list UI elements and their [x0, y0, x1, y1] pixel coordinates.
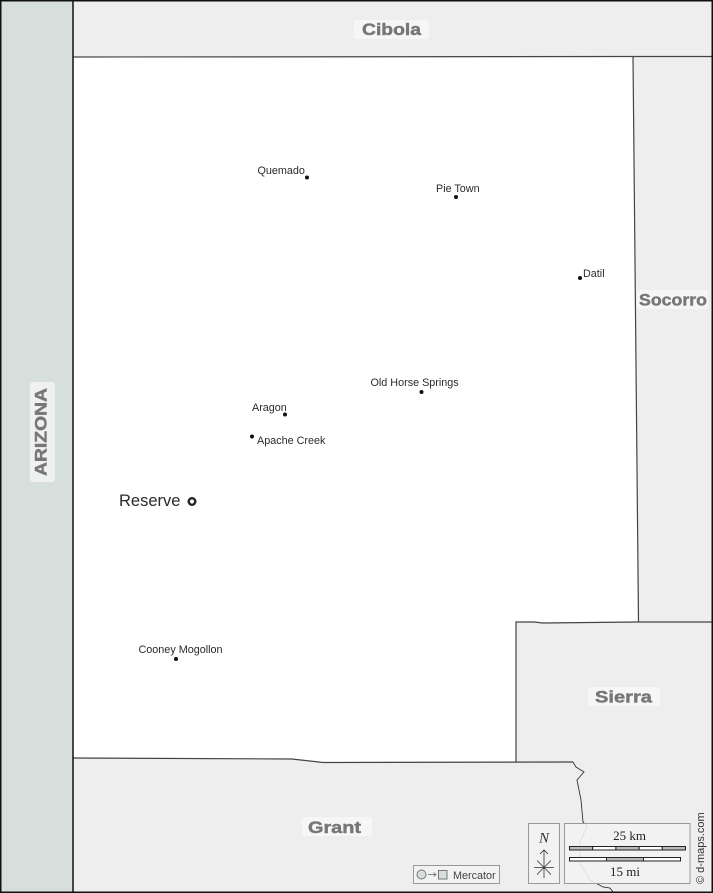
- scale bar box: [564, 824, 690, 884]
- label: Grant: Grant: [308, 819, 362, 837]
- label: Sierra: [588, 687, 660, 706]
- town: Quemado: Quemado: [258, 165, 305, 177]
- label: Grant: [302, 817, 372, 837]
- panel: Arizona state: [1, 1, 73, 892]
- town: Pie Town: Pie Town: [436, 183, 480, 195]
- label: Sierra: Sierra: [595, 688, 653, 706]
- legend: Mercator projection: Mercator: [453, 870, 496, 882]
- town: Cooney Mogollon: Cooney Mogollon: [138, 644, 223, 656]
- town: Apache Creek: Apache Creek: [257, 435, 326, 447]
- scale bar: miles: [570, 858, 680, 861]
- river boundary: [573, 762, 613, 892]
- label: Arizona: ARIZONA: [32, 388, 50, 476]
- north arrow box: [528, 824, 560, 884]
- label: Cibola: [354, 20, 429, 39]
- label: Cibola: Cibola: [362, 21, 422, 39]
- panel: Catron County: [73, 56, 638, 762]
- scale bar box: 25 km: [613, 828, 646, 843]
- county borders: [73, 56, 713, 762]
- town: Aragon: Aragon: [252, 402, 287, 414]
- legend: Mercator projection: [414, 866, 500, 884]
- north arrow box: N: [538, 830, 550, 846]
- scale bar: kilometres: [570, 846, 686, 850]
- label: Arizona: [30, 382, 55, 482]
- town: Reserve (county seat): Reserve: [119, 492, 180, 510]
- label: Socorro: Socorro: [639, 292, 707, 310]
- Arizona state line: [72, 0, 74, 893]
- copyright credit: © d-maps.com: [695, 812, 707, 884]
- town: Datil: Datil: [583, 268, 605, 280]
- scale bar box: 15 mi: [610, 864, 640, 879]
- town: Old Horse Springs: Old Horse Springs: [370, 377, 459, 389]
